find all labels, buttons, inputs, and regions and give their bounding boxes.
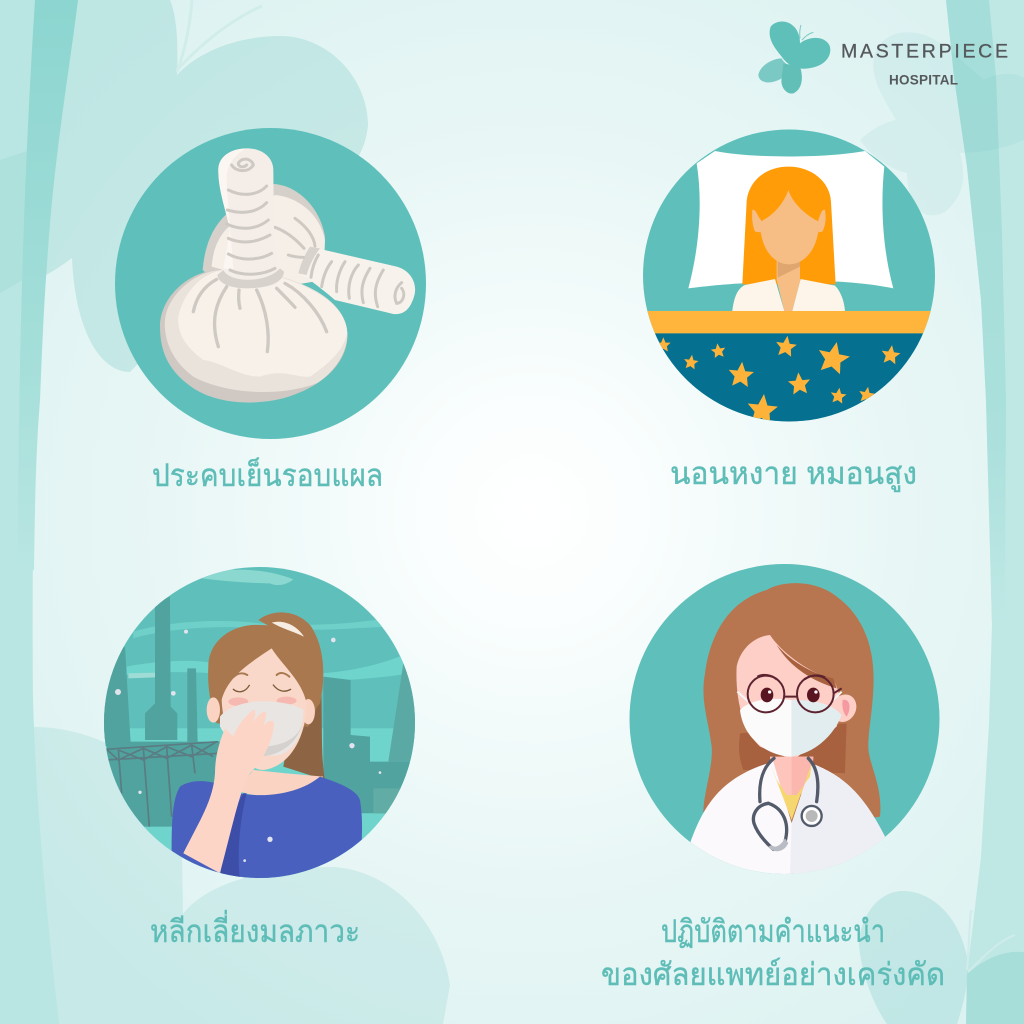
panel: sleeping on high pillow xyxy=(635,130,940,427)
illustration: doctor with mask xyxy=(690,583,885,875)
face xyxy=(760,190,819,264)
logo text: Hospital: HOSPITAL xyxy=(889,72,958,88)
circle background xyxy=(630,564,940,874)
icon: butterfly xyxy=(758,22,830,94)
panel: follow surgeon's advice xyxy=(630,564,940,875)
label: avoid pollution: หลีกเลี่ยงมลภาวะ xyxy=(150,910,360,949)
label: lie on back with high pillow: นอนหงาย หมอนสูง xyxy=(670,456,917,492)
blanket xyxy=(654,333,923,422)
pillow xyxy=(688,151,893,288)
stars xyxy=(656,334,901,425)
icon: woman sleeping xyxy=(635,151,940,427)
illustration: woman with mask in polluted city xyxy=(104,570,415,878)
circle background xyxy=(115,128,426,439)
label: cold compress: ประคบเย็นรอบแผล xyxy=(152,457,383,493)
hair xyxy=(742,167,836,284)
circle background xyxy=(643,130,935,422)
logo xyxy=(758,22,1008,94)
icon: herbal compress xyxy=(160,148,415,403)
logo text: Masterpiece: MASTERPIECE xyxy=(841,40,1008,62)
neck xyxy=(777,258,800,311)
label: follow advice line 1: ปฏิบัติตามคำแนะนำ xyxy=(661,914,885,949)
panel: cold compress xyxy=(115,128,426,439)
blouse xyxy=(732,279,845,311)
label: follow advice line 2: ของศัลยแพทย์อย่างเคร่งคัด xyxy=(601,957,945,992)
panel: avoid pollution xyxy=(104,567,415,878)
circle background xyxy=(104,567,415,878)
